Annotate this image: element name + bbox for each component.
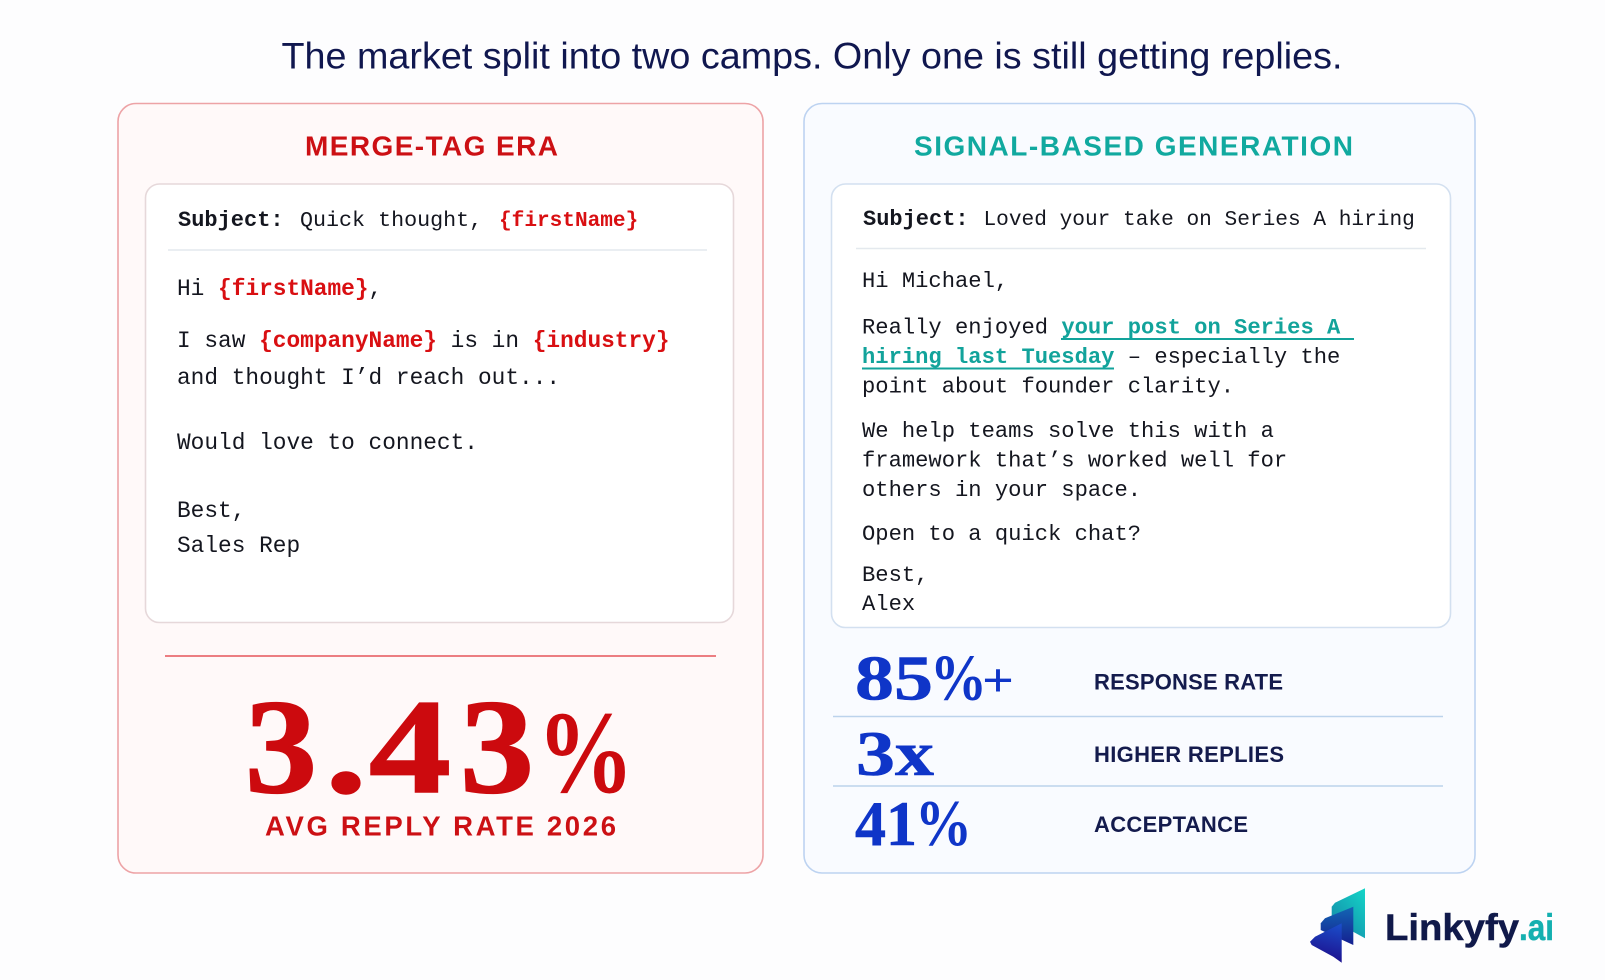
email body: Best, [177, 498, 245, 524]
email body [862, 269, 1354, 617]
email body: others in your space. [862, 478, 1141, 503]
stat row: response rate: + [982, 654, 1014, 707]
stat row: higher replies [856, 718, 1284, 789]
stat row: higher replies: HIGHER REPLIES [1094, 742, 1284, 767]
email body: Would love to connect. [177, 430, 478, 456]
big stat: 3.43% [245, 673, 634, 822]
email body: Sales Rep [177, 533, 300, 559]
big stat: 3.43%: 4 [369, 673, 451, 822]
email body: framework that’s worked well for [862, 448, 1287, 474]
subject line: {firstName} [499, 209, 638, 233]
email body: I saw {companyName} is in {industry} [177, 328, 670, 354]
heading: merge-tag era: MERGE-TAG ERA [305, 130, 558, 162]
panel: merge-tag era [118, 104, 763, 873]
stat row: acceptance [855, 787, 1248, 860]
big stat: 3.43%: 3 [245, 673, 317, 822]
logo: Linkyfy.ai [1310, 888, 1554, 963]
stat row: response rate: % [930, 642, 987, 714]
email body: Hi {firstName}, [177, 276, 382, 302]
subject line: Loved your take on Series A hiring [984, 208, 1415, 232]
email card: merge-tag example [146, 184, 734, 622]
big stat: 3.43%: . [325, 673, 367, 822]
subject line [178, 208, 638, 233]
title: The market split into two camps. Only one is still getting replies. [282, 36, 1342, 76]
stat row: response rate: RESPONSE RATE [1094, 670, 1283, 694]
stat row: response rate: 85 [855, 642, 933, 714]
stat row: acceptance: 41 [855, 788, 917, 859]
big stat: 3.43%: 3 [460, 673, 534, 822]
email body: point about founder clarity. [862, 374, 1234, 400]
email body: and thought I’d reach out... [177, 365, 560, 391]
logo wordmark: .ai [1519, 907, 1554, 948]
email body [177, 276, 670, 559]
subject line: Subject: [178, 208, 284, 233]
logo wordmark: Linkyfy [1385, 907, 1519, 948]
stat label: avg reply rate: AVG REPLY RATE 2026 [265, 810, 616, 842]
email body: We help teams solve this with a [862, 419, 1274, 444]
stat row: higher replies: 3x [856, 718, 934, 789]
email body: Open to a quick chat? [862, 522, 1141, 547]
stat row: acceptance: % [915, 787, 972, 860]
stat row: response rate [855, 642, 1283, 714]
logo icon [1310, 888, 1365, 963]
panel: signal-based generation [804, 104, 1475, 873]
heading: signal-based generation: SIGNAL-BASED GENERATION [914, 130, 1353, 162]
email body: hiring last Tuesday – especially the [862, 345, 1340, 370]
subject line: Subject: [863, 207, 969, 232]
subject line: Quick thought, [300, 208, 482, 233]
email body: Best, [862, 563, 928, 588]
email card: signal-based example [832, 184, 1450, 628]
big stat: 3.43%: % [537, 687, 634, 818]
email body: Hi Michael, [862, 269, 1008, 294]
stat row: acceptance: ACCEPTANCE [1094, 812, 1248, 837]
email body: Really enjoyed your post on Series A [862, 316, 1341, 340]
email body: Alex [862, 592, 915, 617]
